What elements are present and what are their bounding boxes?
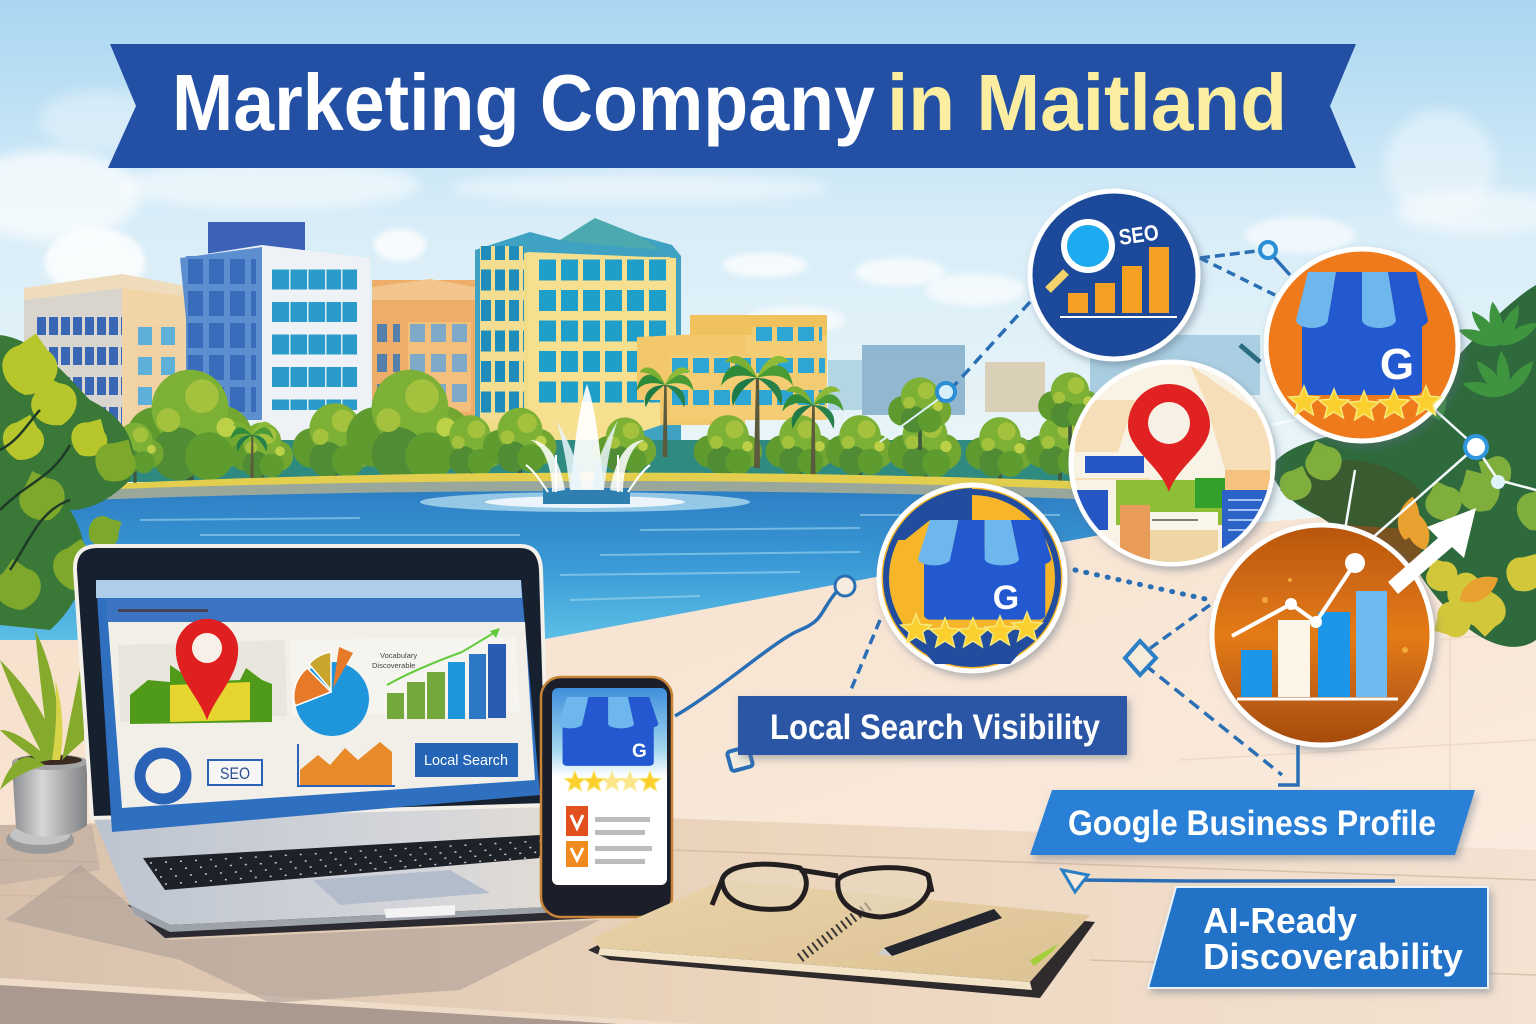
- label: Google Business Profile: Google Business Profile: [1068, 804, 1436, 843]
- sky background: [0, 0, 1536, 560]
- smartphone: [541, 677, 672, 917]
- building: blue and white tower: [180, 222, 370, 440]
- building: beige office: [24, 274, 197, 440]
- label: AI-Ready Discoverability: Discoverability: [1203, 936, 1463, 977]
- map tiles: [1075, 365, 1275, 567]
- label: Local Search Visibility: Local Search Visibility: [770, 708, 1100, 747]
- badge: SEO chart: SEO: [1117, 220, 1160, 250]
- clouds: [0, 90, 1536, 334]
- building: large teal and yellow tower: [475, 218, 681, 470]
- palm trees: [230, 356, 844, 489]
- label: AI-Ready Discoverability: AI-Ready: [1203, 900, 1357, 941]
- label: Local Search Visibility: [738, 696, 1127, 755]
- distant buildings: [828, 335, 1260, 415]
- title text: Marketing Company: [172, 58, 875, 147]
- screen pie chart: [294, 647, 369, 736]
- notebook: [588, 880, 1095, 998]
- sand promenade: [0, 500, 1536, 1024]
- growth arrow: [1388, 508, 1476, 594]
- label: Google Business Profile: [1030, 790, 1475, 855]
- foliage: right tropical plants: [1270, 285, 1536, 647]
- white connector lines: [1272, 405, 1536, 540]
- park trees: [100, 370, 1101, 515]
- lake shoreline: [90, 473, 1100, 508]
- badge: Google store with orange background: G: [1380, 340, 1414, 389]
- badge: growth chart: [1212, 525, 1432, 745]
- screen bar chart: Vocabulary: [380, 651, 417, 660]
- title text: in Maitland: [887, 58, 1287, 147]
- screen bottom widgets: [140, 742, 518, 799]
- laptop lid: [75, 546, 548, 818]
- building: orange office: [372, 279, 475, 430]
- eyeglasses: [712, 864, 932, 917]
- floor tile lines: [1180, 620, 1536, 790]
- fountain: [526, 384, 650, 504]
- badge: Google store with orange background: [1266, 249, 1458, 441]
- building: yellow low-rise: [637, 315, 827, 425]
- badge: Google store with yellow background: G: [993, 579, 1019, 617]
- potted plant: [0, 630, 88, 854]
- screen bar chart: [372, 628, 506, 719]
- foliage: left foreground tree: [0, 329, 146, 630]
- screen bar chart: Discoverable: [372, 661, 415, 670]
- laptop: [75, 546, 640, 938]
- laptop screen: [96, 580, 540, 832]
- title text: [172, 58, 1287, 147]
- title banner: [108, 44, 1356, 168]
- smartphone: G: [632, 741, 647, 762]
- label: AI-Ready Discoverability: [1148, 887, 1488, 988]
- lake water: [0, 491, 1100, 640]
- laptop base: [92, 805, 640, 938]
- desk surface: [0, 815, 1536, 1024]
- badge: map pin: [1071, 362, 1275, 567]
- connector lines: [675, 250, 1395, 881]
- connector nodes: [727, 242, 1505, 892]
- screen pin and map: [130, 619, 272, 724]
- screen bottom widgets: SEO: [220, 764, 250, 783]
- screen bottom widgets: Local Search: [424, 753, 508, 769]
- pen: [878, 909, 1002, 956]
- badge: SEO chart: [1030, 191, 1198, 359]
- badge: Google store with yellow background: [879, 485, 1065, 671]
